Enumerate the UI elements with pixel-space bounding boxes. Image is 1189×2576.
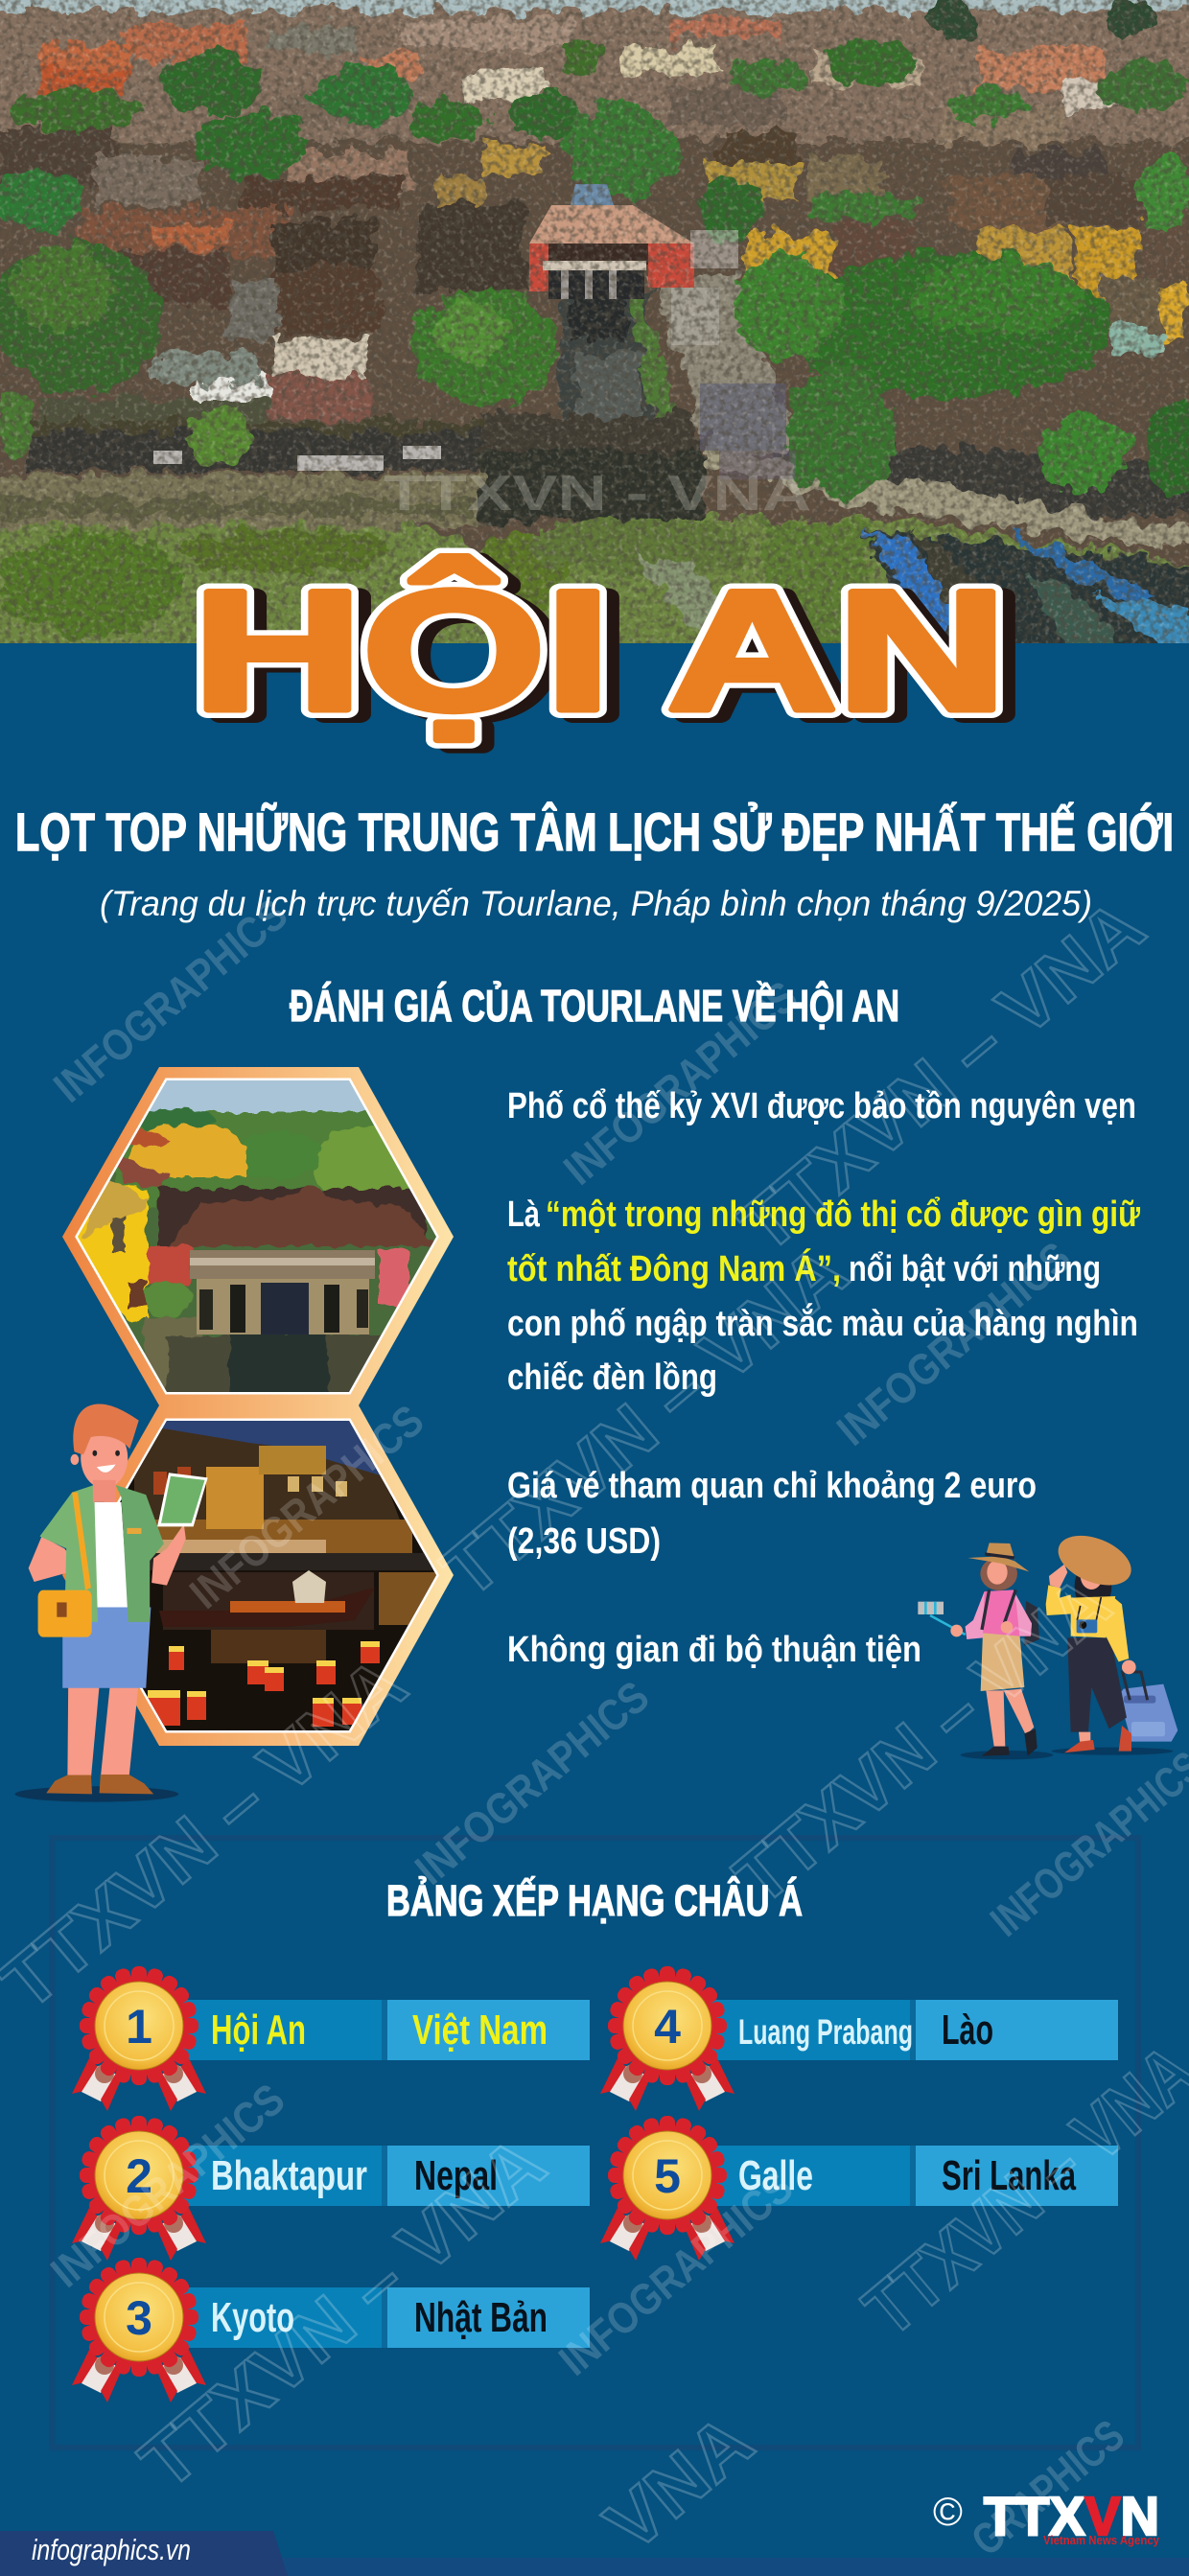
text block: Tourlane assessment points: Không gian đi bộ thuận tiện <box>507 1630 921 1670</box>
panel: hexagon photo of the covered bridge <box>58 1064 460 1409</box>
icon: male tourist holding a map <box>14 1404 208 1802</box>
rank 4: Luang Prabang, Lào <box>600 1966 1118 2111</box>
rank 5: Galle, Sri Lanka <box>600 2116 1118 2261</box>
footer tab with website <box>0 2531 288 2576</box>
crowd <box>153 230 796 479</box>
rank 3: Kyoto, Nhật Bản: 3 <box>126 2291 152 2345</box>
rank 3: Kyoto, Nhật Bản: Nhật Bản <box>414 2294 548 2341</box>
rank 2: Bhaktapur, Nepal <box>72 2116 590 2261</box>
watermarks: TTXVN – VNA <box>723 883 1159 1268</box>
main title: HỘI AN: HỘI AN <box>193 555 1007 746</box>
rank 5: Galle, Sri Lanka: Galle <box>738 2152 813 2199</box>
icon: two women tourists with selfie stick and suitcase <box>918 1526 1177 1759</box>
logo: TTXVN: TTXVN <box>984 2486 1159 2547</box>
photo highlights <box>0 0 1189 643</box>
rank 2: Bhaktapur, Nepal: Bhaktapur <box>211 2152 367 2199</box>
photo texture <box>0 0 1189 643</box>
photo agency stamp: TTXVN - VNA <box>384 466 811 522</box>
rank 1: Hội An, Việt Nam: 1 <box>126 2000 152 2054</box>
text block: Tourlane assessment points <box>507 1086 1140 1670</box>
main title: HỘI AN: HỘI AN <box>205 560 1019 751</box>
rank 4: Luang Prabang, Lào: 4 <box>654 2000 681 2054</box>
hero photo: aerial view of Hoi An and the Japanese covered bridge <box>0 0 1189 690</box>
text block: Tourlane assessment points: nổi bật với những <box>849 1249 1101 1289</box>
rank 1: Hội An, Việt Nam <box>72 1966 590 2111</box>
rank 2: Bhaktapur, Nepal: 2 <box>126 2149 152 2203</box>
logo: TTXVN: © <box>933 2489 963 2534</box>
source note: (Trang du lịch trực tuyến Tourlane, Pháp bình chọn tháng 9/2025) <box>100 884 1092 923</box>
text block: Tourlane assessment points: tốt nhất Đông Nam Á”, <box>507 1247 841 1289</box>
watermarks: TTXVN – VNA <box>124 2120 560 2505</box>
text block: Tourlane assessment points: Giá vé tham quan chỉ khoảng 2 euro <box>507 1466 1037 1506</box>
logo: TTXVN: Vietnam News Agency <box>1043 2533 1160 2547</box>
footer tab with website: infographics.vn <box>32 2533 191 2566</box>
watermarks: VNA <box>589 2398 768 2567</box>
main title: HỘI AN <box>193 555 1019 751</box>
watermarks <box>0 883 1189 2567</box>
rank 3: Kyoto, Nhật Bản: Kyoto <box>211 2294 294 2341</box>
rank 4: Luang Prabang, Lào: Luang Prabang <box>738 2012 913 2052</box>
watermarks: GRAPHICS <box>962 2410 1133 2565</box>
rank 5: Galle, Sri Lanka: 5 <box>654 2149 681 2203</box>
trees are drawn as soft clusters <box>0 242 160 391</box>
rank 1: Hội An, Việt Nam: Hội An <box>211 2007 306 2054</box>
heading: Asian ranking: BẢNG XẾP HẠNG CHÂU Á <box>386 1876 803 1925</box>
text block: Tourlane assessment points: Là <box>507 1195 541 1235</box>
watermarks: INFOGRAPHICS <box>41 2074 293 2297</box>
main title: HỘI AN: HỘI AN <box>193 555 1007 746</box>
panel: hexagon photo of the lantern river at night <box>58 1405 454 1746</box>
rank 5: Galle, Sri Lanka: Sri Lanka <box>942 2152 1076 2199</box>
footer strip <box>0 2558 1189 2576</box>
text block: Tourlane assessment points: (2,36 USD) <box>507 1521 661 1562</box>
text block: Tourlane assessment points: chiếc đèn lồng <box>507 1358 717 1398</box>
watermarks: INFOGRAPHICS <box>44 889 296 1112</box>
watermarks: INFOGRAPHICS <box>180 1395 432 1618</box>
watermarks: INFOGRAPHICS <box>554 971 806 1195</box>
watermarks: INFOGRAPHICS <box>549 2162 802 2385</box>
rank 2: Bhaktapur, Nepal: Nepal <box>414 2152 498 2199</box>
heading: Tourlane assessment: ĐÁNH GIÁ CỦA TOURLANE VỀ HỘI AN <box>290 981 899 1031</box>
watermarks: TTXVN – VNA <box>718 1560 1126 1920</box>
watermarks: INFOGRAPHICS <box>406 1671 658 1894</box>
rank 4: Luang Prabang, Lào: Lào <box>942 2007 993 2054</box>
rank 3: Kyoto, Nhật Bản <box>72 2258 590 2402</box>
panel: Asian ranking frame <box>52 1838 1138 2448</box>
rank 1: Hội An, Việt Nam: Việt Nam <box>412 2007 548 2054</box>
watermarks: TTXVN – VNA <box>426 1228 862 1613</box>
covered bridge <box>571 184 614 205</box>
watermarks: INFOGRAPHICS <box>828 1232 1080 1455</box>
